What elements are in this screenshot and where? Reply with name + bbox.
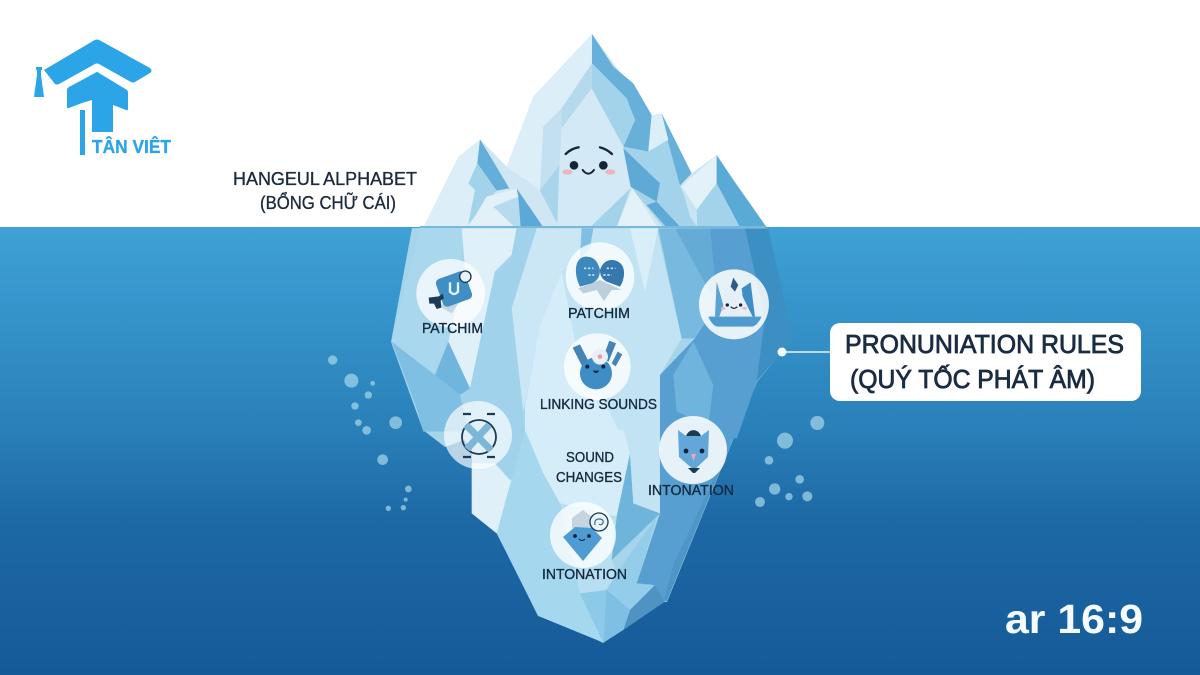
label: patchim center: PATCHIM: [568, 306, 630, 322]
heading: hangeul alphabet: [233, 169, 417, 213]
icon: crossed globe: [444, 401, 512, 469]
icon: tag: [416, 259, 485, 328]
icon: mini iceberg on boat: [699, 269, 769, 339]
label: patchim left: PATCHIM: [422, 321, 483, 337]
logo arrow: [67, 72, 128, 132]
label: intonation right: INTONATION: [648, 483, 734, 499]
label: linking sounds: LINKING SOUNDS: [540, 397, 657, 413]
ocean background: [0, 227, 1200, 675]
icon: bunny: [564, 333, 631, 400]
logo tassel: [34, 67, 44, 97]
callout: pronunciation rules: (QUÝ TỐC PHÁT ÂM): [850, 364, 1095, 394]
logo: tan viet: [34, 40, 171, 157]
callout: pronunciation rules: PRONUNIATION RULES: [845, 331, 1124, 359]
heading: hangeul alphabet: HANGEUL ALPHABET: [233, 169, 417, 189]
callout connector: [778, 348, 832, 356]
label: sound changes: CHANGES: [556, 470, 622, 486]
sky background: [0, 0, 1200, 228]
label: intonation bottom: INTONATION: [542, 567, 627, 583]
caption: aspect ratio: ar 16:9: [1005, 596, 1143, 642]
logo wordmark: TÂN VIÊT: [92, 136, 171, 157]
waterline: [420, 226, 765, 228]
logo cap: [44, 40, 152, 84]
logo bar: [80, 110, 85, 155]
label: sound changes: [556, 450, 622, 486]
icon: iceberg face: [562, 147, 615, 175]
icon: diamond face: [550, 502, 616, 568]
iceberg above water: [423, 34, 767, 227]
callout: pronunciation rules: [830, 323, 1141, 401]
icon: cat face: [659, 416, 727, 484]
icon: speech bubbles: [566, 242, 634, 311]
bubbles left: [328, 355, 412, 511]
bubbles right: [755, 416, 824, 507]
heading: hangeul alphabet: (BỔNG CHỮ CÁI): [260, 192, 396, 213]
iceberg below water: [391, 228, 793, 643]
label: sound changes: SOUND: [566, 450, 614, 466]
